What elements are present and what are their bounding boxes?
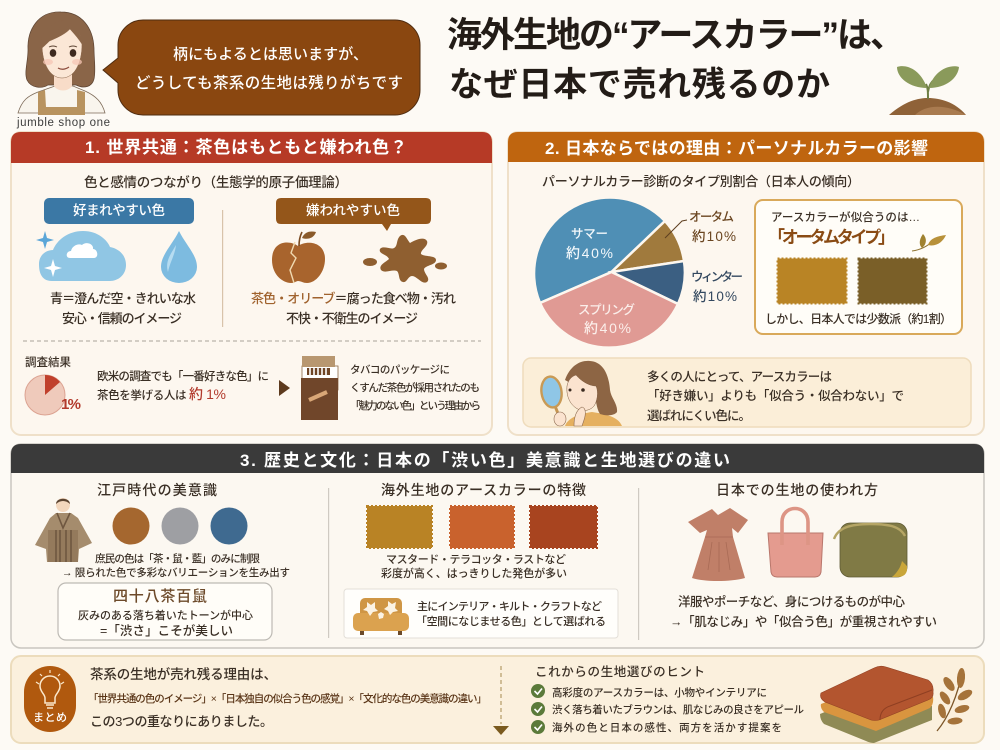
text: summary reasons: この3つの重なりにありました。 [90, 714, 273, 729]
icon: sofa [353, 598, 409, 635]
pie labels: 約40% [584, 320, 631, 336]
icon: stain splat [363, 235, 447, 283]
speech bubble: どうしても茶系の生地は残りがちです [135, 73, 403, 92]
icon: leaf branch [937, 668, 974, 731]
text: package reason: くすんだ茶色が採用されたのも [350, 381, 480, 394]
text: usage in Japan: →「肌なじみ」や「似合う色」が重視されやすい [670, 614, 937, 629]
panel 2 heading [508, 132, 984, 162]
text: overseas features: マスタード・テラコッタ・ラストなど [386, 553, 566, 566]
subheading: color and emotion: 色と感情のつながり（生態学的原子価理論） [84, 174, 348, 190]
label: disliked colors: 嫌われやすい色 [306, 202, 400, 218]
callout: mirror woman [523, 358, 971, 427]
icon: sprout [889, 66, 966, 115]
callout: 48 browns 100 grays: =「渋さ」こそが美しい [100, 623, 233, 638]
arrow: down [493, 666, 509, 735]
title: 海外生地の“アースカラー”は、 [447, 16, 905, 55]
text: callout message: 「好き嫌い」よりも「似合う・似合わない」で [647, 388, 904, 403]
callout: autumn type box: アースカラーが似合うのは… [771, 210, 920, 224]
pie labels: 約40% [566, 245, 613, 261]
text: blue meaning: 青＝澄んだ空・きれいな水 [50, 291, 196, 306]
icon: summary badge with light bulb [24, 666, 76, 732]
checklist: hints [531, 684, 804, 734]
text: survey result: 茶色を挙げる人は 約 1% [97, 386, 226, 402]
panel 1 heading: 1. 世界共通：茶色はもともと嫌われ色？ [85, 137, 407, 157]
panel: 3 history and culture [11, 444, 984, 648]
speech bubble [103, 20, 420, 115]
icon: dress [688, 508, 748, 581]
pie labels [566, 210, 743, 336]
checklist: hints: 高彩度のアースカラーは、小物やインテリアに [552, 686, 767, 699]
text: survey result: 欧米の調査でも「一番好きな色」に [97, 369, 269, 383]
text: commoners' colors [62, 552, 290, 579]
speech bubble: 柄にもよるとは思いますが、 [173, 45, 368, 63]
icon: summary badge with light bulb: まとめ [33, 711, 67, 724]
text: callout message: 選ばれにくい色に。 [647, 408, 751, 423]
subheading: overseas earth colors: 海外生地のアースカラーの特徴 [381, 482, 586, 498]
callout: interior use: 「空間になじませる色」として選ばれる [416, 614, 606, 628]
text: survey result [97, 369, 269, 402]
heading: hints: これからの生地選びのヒント [535, 664, 705, 679]
pie labels: 約10% [692, 229, 736, 244]
subheading: usage in Japan: 日本での生地の使われ方 [716, 482, 878, 498]
text: summary reasons: 茶系の生地が売れ残る理由は、 [90, 666, 277, 682]
checklist: hints: 渋く落ち着いたブラウンは、肌なじみの良さをアピール [552, 703, 804, 716]
text: commoners' colors: 庶民の色は「茶・鼠・藍」のみに制限 [95, 552, 260, 565]
swatches: tea, mouse, indigo [112, 508, 248, 544]
callout: autumn type box: 「オータムタイプ」 [768, 228, 895, 247]
text: package reason: 「魅力のない色」という理由から [350, 399, 481, 412]
text: blue meaning: 安心・信頼のイメージ [62, 311, 182, 326]
pie labels: オータム [689, 210, 734, 224]
panel 3 heading: 3. 歴史と文化：日本の「渋い色」美意識と生地選びの違い [240, 450, 730, 470]
pie chart: personal color types [534, 197, 685, 348]
subheading: Edo aesthetics: 江戸時代の美意識 [97, 482, 217, 498]
label: liked colors [44, 198, 194, 224]
icon: pouch [834, 523, 907, 577]
text: brown meaning: 不快・不衛生のイメージ [286, 311, 418, 326]
survey pie chart 1% [25, 355, 81, 415]
text: package reason: タバコのパッケージに [350, 364, 450, 376]
subheading: type share: パーソナルカラー診断のタイプ別割合（日本人の傾向） [542, 174, 860, 189]
pie labels: ウィンター [691, 270, 743, 284]
callout: interior use: 主にインテリア・キルト・クラフトなど [417, 599, 602, 613]
text: callout message [647, 369, 904, 423]
panel 3 heading [11, 444, 984, 473]
icon: autumn leaf [912, 234, 946, 251]
callout: autumn type box: しかし、日本人では少数派（約1割） [765, 311, 952, 326]
icon: tote bag [768, 508, 823, 577]
text: summary reasons: 「世界共通の色のイメージ」×「日本独自の似合う色の感覚」×「文化的な色の美意識の違い」 [88, 692, 487, 705]
callout: autumn type box [755, 200, 962, 334]
swatch: mustard [778, 258, 846, 304]
callout: 48 browns 100 grays [58, 583, 272, 640]
icon: rotten apple [272, 232, 325, 283]
text: package reason [350, 364, 481, 412]
panel: 1 world-wide brown dislike [11, 132, 492, 435]
text: overseas features [381, 553, 567, 580]
icon: cigarette pack [301, 356, 338, 420]
callout: 48 browns 100 grays: 灰みのある落ち着いたトーンが中心 [78, 608, 253, 622]
survey pie chart 1%: 調査結果 [25, 355, 72, 369]
callout: 48 browns 100 grays: 四十八茶百鼠 [113, 587, 207, 605]
icon: cloud [36, 231, 126, 281]
pie labels: 約10% [693, 289, 737, 304]
swatches: mustard, terracotta, rust [367, 506, 597, 548]
text: summary reasons [88, 666, 487, 729]
text: brown meaning [251, 291, 456, 326]
panel: 2 personal color [508, 132, 984, 435]
callout: interior use [344, 589, 618, 638]
text: usage in Japan: 洋服やポーチなど、身につけるものが中心 [678, 594, 905, 609]
text: brown meaning: 茶色・オリーブ＝腐った食べ物・汚れ [251, 291, 456, 306]
icon: woman with mirror [539, 361, 622, 426]
arrow [279, 380, 290, 396]
icon: folded fabric stack [820, 666, 933, 743]
text: overseas features: 彩度が高く、はっきりした発色が多い [381, 566, 567, 580]
pie labels: スプリング [578, 302, 635, 317]
panel: summary [11, 656, 984, 743]
icon: man in kimono [35, 498, 92, 562]
label: liked colors: 好まれやすい色 [73, 202, 165, 218]
label: shop name: jumble shop one [16, 117, 110, 129]
panel 1 heading [11, 132, 492, 163]
panel 2 heading: 2. 日本ならではの理由：パーソナルカラーの影響 [545, 138, 928, 158]
text: commoners' colors: → 限られた色で多彩なバリエーションを生み出す [62, 566, 290, 579]
label: disliked colors [276, 198, 431, 231]
text: callout message: 多くの人にとって、アースカラーは [647, 369, 832, 384]
text: usage in Japan [670, 594, 937, 629]
icon: shop staff avatar [18, 12, 105, 115]
icon: water drop [161, 231, 197, 283]
text: blue meaning [50, 291, 196, 326]
checklist: hints: 海外の色と日本の感性、両方を活かす提案を [552, 721, 782, 734]
swatch: olive brown [858, 258, 926, 304]
survey pie chart 1%: 1% [61, 396, 81, 413]
pie labels: サマー [571, 227, 608, 241]
title: なぜ日本で売れ残るのか [449, 66, 830, 104]
title [447, 16, 905, 104]
